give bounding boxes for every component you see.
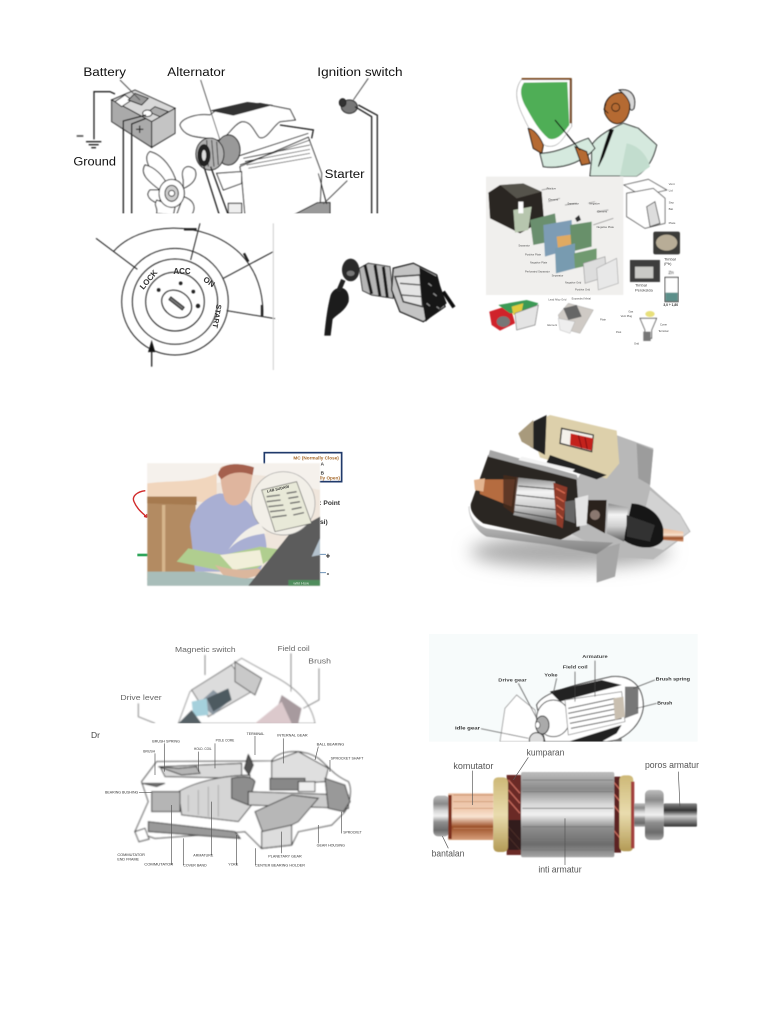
label: plate grid bbox=[547, 296, 607, 327]
label: A: A bbox=[321, 461, 325, 466]
label: Ignition switch: Ignition switch bbox=[317, 65, 403, 79]
label: Field coil: Field coil bbox=[278, 644, 310, 653]
label: exploded battery parts: Positive Plate bbox=[525, 253, 542, 257]
armature bbox=[474, 475, 607, 533]
icon: green board bbox=[517, 79, 572, 146]
label: exploded battery parts: Perforated Separator bbox=[525, 270, 550, 274]
label: Alternator: Alternator bbox=[167, 65, 225, 79]
diagram: ignition key dial bbox=[96, 223, 275, 370]
part labels bbox=[105, 732, 363, 867]
solenoid bbox=[518, 415, 619, 479]
label: Timbal Peroksida: Peroksida bbox=[635, 287, 653, 292]
part labels: BALL BEARING bbox=[317, 743, 345, 747]
label: exploded battery parts bbox=[518, 186, 614, 292]
label: battery cell cap bbox=[616, 309, 669, 346]
part labels: CENTER BEARING HOLDER bbox=[255, 863, 306, 867]
label: exploded battery parts: Separator bbox=[567, 202, 579, 206]
icon: plate grid bbox=[558, 303, 593, 333]
panel: battery line drawing bbox=[624, 179, 667, 228]
panel: exploded battery bbox=[486, 177, 623, 295]
label: battery cell cap: Grid bbox=[634, 342, 640, 346]
label: Field coil: Field coil bbox=[563, 664, 588, 670]
ground wire and symbol bbox=[77, 92, 115, 148]
part labels: SPROCKET SHAFT bbox=[331, 756, 363, 760]
label: plate grid: Element bbox=[547, 323, 557, 327]
label: plate grid: Lead Alloy Grid bbox=[548, 298, 567, 302]
label: Armature: Armature bbox=[582, 654, 608, 660]
label: exploded battery parts: Negative bbox=[589, 202, 600, 206]
illustration: teacher pointing at board bbox=[517, 79, 657, 176]
label: Starter: Starter bbox=[325, 167, 365, 181]
photo: lead peroxide sample bbox=[630, 260, 660, 282]
label: kumparan: kumparan bbox=[527, 747, 564, 757]
photo: ignition switch bbox=[324, 259, 454, 336]
part labels: COMMUTATOR bbox=[144, 863, 174, 867]
label: exploded battery parts: Element bbox=[597, 210, 607, 214]
illustration: man reading a manual bbox=[147, 463, 320, 586]
diagram: charging and starting circuit bbox=[73, 65, 403, 215]
label: Brush: Brush bbox=[308, 657, 331, 666]
diagram: starter motor sectional view bbox=[105, 732, 363, 867]
label: poros armatur: poros armatur bbox=[645, 760, 699, 770]
label: NC: MC (Normally Close) bbox=[293, 455, 339, 460]
label: plate grid: Plate bbox=[600, 318, 607, 322]
part labels: INTERNAL GEAR bbox=[277, 733, 308, 737]
label: watermark: wiki How bbox=[293, 580, 309, 585]
label: Pb: (Pb) bbox=[664, 261, 672, 266]
label: beaker reading: 3,0 ÷ 1,80 bbox=[663, 303, 678, 307]
photo: lead sample bbox=[653, 232, 680, 254]
label: exploded battery parts: Positive bbox=[547, 186, 556, 190]
part labels: BEARING BUSHING bbox=[105, 790, 139, 794]
label: battery line drawing parts: Plate bbox=[669, 221, 676, 225]
part labels: PLANETARY GEAR bbox=[268, 854, 302, 858]
label: Timbal: Timbal bbox=[664, 257, 676, 262]
icon: battery cell cap bbox=[640, 311, 657, 341]
label: bantalan: bantalan bbox=[432, 849, 464, 859]
label: battery line drawing parts: Vent bbox=[669, 182, 675, 186]
label: Timbal Peroksida bbox=[635, 283, 653, 292]
leader lines bbox=[481, 661, 657, 738]
leader lines bbox=[442, 757, 680, 865]
leader lines bbox=[139, 736, 342, 865]
part labels: COMMUTATOR bbox=[117, 853, 146, 857]
nose housing bbox=[570, 432, 691, 583]
label: B: B bbox=[321, 471, 325, 476]
label: clipped heading: Dr bbox=[91, 730, 100, 740]
label: si: si) bbox=[320, 519, 328, 526]
box: contact legend bbox=[264, 453, 342, 482]
label: Brush spring: Brush spring bbox=[656, 676, 690, 682]
panel: schematic behind reading illustration bbox=[133, 453, 342, 578]
part labels: TERMINAL bbox=[247, 732, 264, 736]
label: Brush: Brush bbox=[657, 701, 672, 707]
part labels: SPROCKET bbox=[343, 830, 362, 834]
icon: teacher bbox=[528, 90, 657, 176]
diagram collage: battery construction bbox=[486, 177, 680, 346]
label: exploded battery parts: Negative Grid bbox=[565, 280, 582, 284]
label: battery cell cap: Terminal bbox=[658, 329, 669, 333]
label: battery cell cap: Post bbox=[616, 330, 622, 334]
part labels: END FRAME bbox=[117, 857, 140, 861]
icon: battery bbox=[112, 90, 175, 147]
wire: blue terminals bbox=[317, 554, 326, 573]
frame and yoke bbox=[468, 450, 613, 554]
wire: green bbox=[137, 554, 148, 556]
label: plate grid: Expanded Metal bbox=[572, 296, 591, 300]
icon: beaker: Zn bbox=[668, 270, 674, 275]
part labels: COVER BAND bbox=[183, 863, 207, 867]
label: battery line drawing parts bbox=[669, 182, 676, 225]
label: Drive lever: Drive lever bbox=[120, 693, 162, 702]
bearing left bbox=[433, 796, 449, 836]
core bbox=[521, 772, 614, 857]
label: Yoke: Yoke bbox=[544, 672, 558, 678]
icon: starter bbox=[293, 173, 347, 215]
label: inti armatur: inti armatur bbox=[538, 864, 582, 874]
label: NO: lly Open) bbox=[320, 476, 340, 481]
part labels: BRUSH bbox=[143, 750, 156, 754]
label: battery cell cap: Vent Plug bbox=[621, 314, 633, 318]
part labels: GEAR HOUSING bbox=[317, 844, 345, 848]
label: battery line drawing parts: Lid bbox=[669, 189, 673, 193]
icon: coloured battery cells bbox=[489, 300, 538, 331]
arrow: red bbox=[133, 491, 147, 517]
dial label: ON: ON bbox=[202, 275, 217, 289]
diagram: magnetic switch cross section bbox=[120, 644, 331, 723]
label: exploded battery parts: Separator bbox=[552, 274, 563, 278]
battery cables bbox=[123, 115, 146, 215]
label: exploded battery parts: Separator bbox=[518, 244, 530, 248]
dial label: ACC: ACC bbox=[173, 267, 191, 276]
photo: starter motor cutaway bbox=[468, 415, 691, 583]
commutator bbox=[448, 793, 493, 840]
label: exploded battery parts: Negative Plate bbox=[597, 225, 614, 229]
dial label: START: START bbox=[210, 304, 224, 329]
label: Drive gear: Drive gear bbox=[498, 677, 527, 683]
part labels: HOLD. COIL bbox=[194, 747, 212, 751]
label: battery line drawing parts: Sep bbox=[669, 200, 674, 204]
icon: beaker bbox=[665, 270, 678, 302]
label: exploded battery parts: Element bbox=[548, 198, 558, 202]
label: minus: - bbox=[327, 569, 330, 578]
label: battery line drawing parts: Bat bbox=[669, 207, 673, 211]
dial label: LOCK: LOCK bbox=[138, 268, 160, 291]
label: exploded battery parts: Positive Grid bbox=[575, 288, 591, 292]
label: Point: : Point bbox=[319, 500, 341, 507]
icon: engine bbox=[143, 102, 322, 215]
label: Idle gear: Idle gear bbox=[455, 725, 480, 731]
shadow bbox=[470, 536, 670, 568]
windings bbox=[507, 775, 523, 855]
label: parts list title: LAB SUDARI bbox=[267, 485, 290, 494]
icon: ignition switch bbox=[339, 78, 377, 215]
brass rings bbox=[493, 777, 508, 852]
label: battery cell cap: Cover bbox=[660, 323, 667, 327]
shaft and bearing right bbox=[634, 803, 646, 827]
diagram: starter labelled section bbox=[455, 655, 690, 742]
part labels: YOKE bbox=[228, 863, 239, 867]
label: Battery: Battery bbox=[83, 65, 127, 79]
label: Ground: Ground bbox=[73, 154, 116, 168]
label: Timbal Peroksida: Timbal bbox=[635, 283, 647, 288]
label: Magnetic switch: Magnetic switch bbox=[175, 645, 236, 654]
label: komutator: komutator bbox=[453, 761, 493, 771]
label: exploded battery parts: Negative Plate bbox=[530, 260, 548, 264]
part labels: ARMATURE bbox=[193, 854, 214, 858]
label: plus: + bbox=[326, 551, 331, 560]
part labels: POLE CORE bbox=[216, 739, 235, 743]
label: battery cell cap: Gas bbox=[628, 309, 634, 313]
photo: armature with labels bbox=[432, 747, 699, 874]
part labels: BRUSH SPRING bbox=[152, 740, 180, 744]
